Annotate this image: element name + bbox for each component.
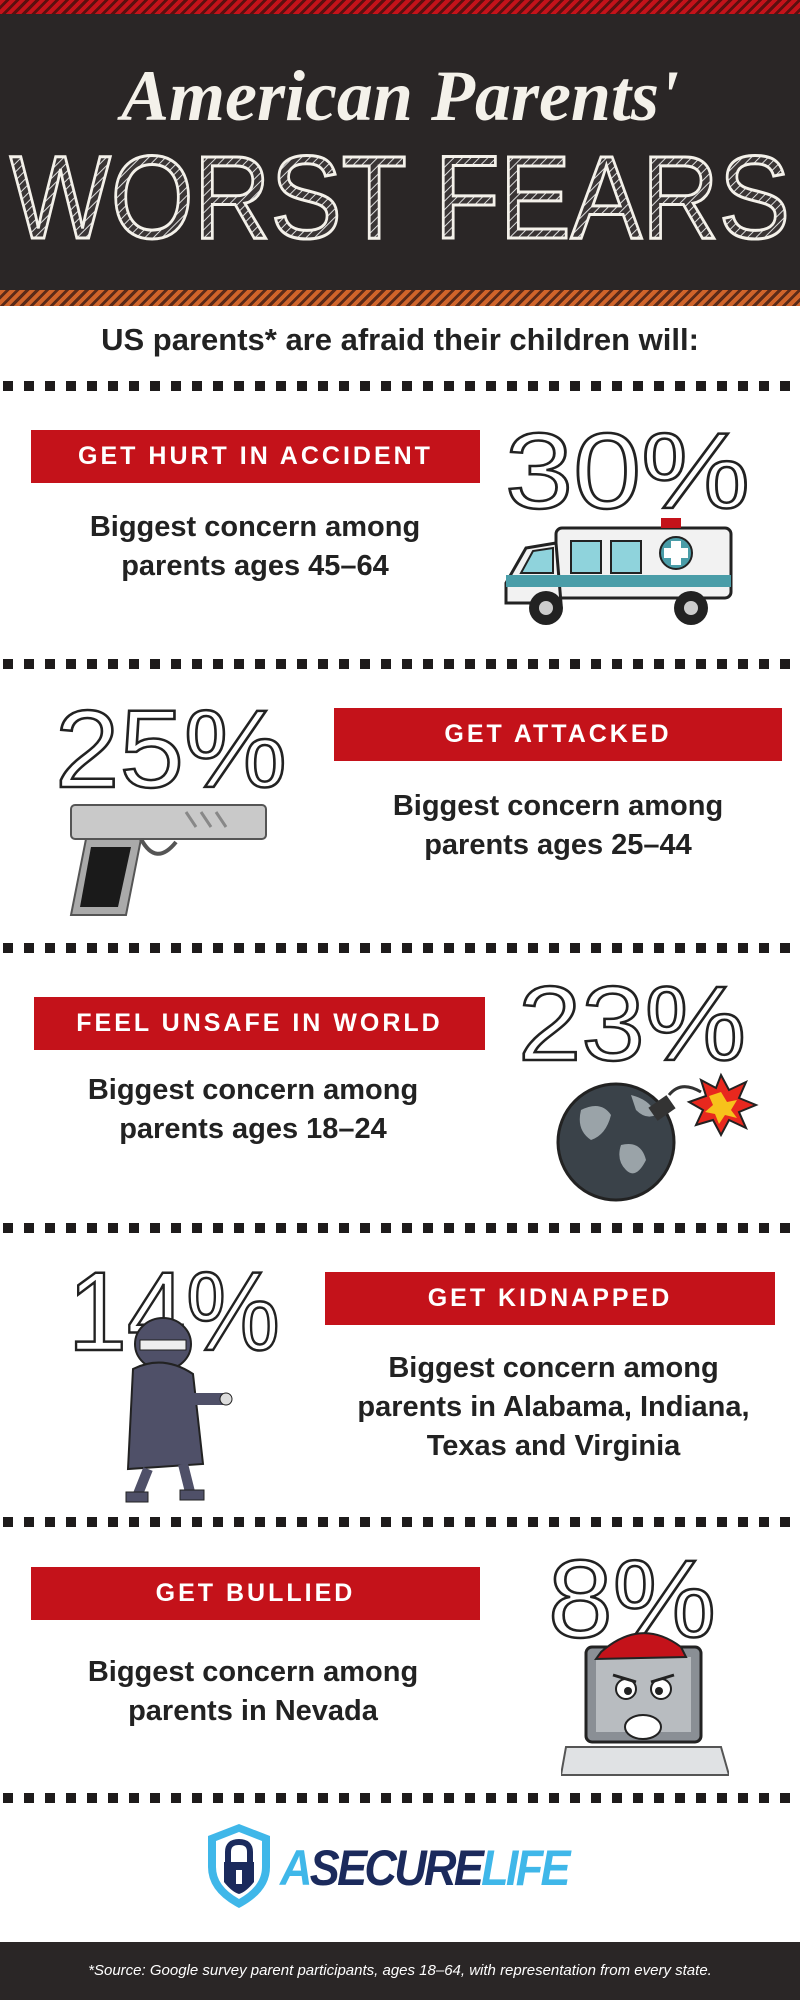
icon: gun [70,804,267,916]
label: GET KIDNAPPED [428,1284,672,1312]
bottom orange stripe [0,290,800,306]
description [88,1074,418,1145]
title: American Parents' [117,56,679,136]
description: Biggest concern among [88,1656,418,1688]
label: GET BULLIED [156,1579,355,1607]
description: Texas and Virginia [427,1430,680,1462]
section: attacked [55,695,782,916]
label: GET HURT IN ACCIDENT [78,442,433,470]
description: parents in Alabama, Indiana, [357,1391,750,1423]
label [31,430,480,483]
icon: globe bomb [556,1072,758,1202]
description: Biggest concern among [90,511,420,543]
section: accident [31,420,750,625]
description: Biggest concern among [393,790,723,822]
description: parents ages 45–64 [121,550,389,582]
header band [0,0,800,306]
description: parents in Nevada [128,1695,378,1727]
description: Biggest concern among [388,1352,719,1384]
logo [208,1824,572,1908]
label [31,1567,480,1620]
description: parents ages 25–44 [424,829,692,861]
top red stripe [0,0,800,14]
icon: kidnapper [126,1317,232,1502]
section: unsafe [34,972,758,1202]
icon: angry laptop [561,1632,729,1776]
label: GET ATTACKED [444,720,672,748]
footer [0,1942,800,2000]
description: Biggest concern among [88,1074,418,1106]
description [393,790,723,861]
section: kidnapped [68,1252,775,1502]
label: FEEL UNSAFE IN WORLD [76,1009,443,1037]
source note: *Source: Google survey parent participants, ages 18–64, with representation from every state. [88,1962,712,1979]
description [88,1656,418,1727]
subtitle: US parents* are afraid their children will: [101,322,699,357]
icon: ambulance [504,518,732,625]
description [90,511,420,582]
label [334,708,782,761]
label [325,1272,775,1325]
wordmark: ASECURELIFE [280,1840,568,1896]
description: parents ages 18–24 [119,1113,387,1145]
description [357,1352,750,1462]
label [34,997,485,1050]
section: bullied [31,1545,729,1776]
icon: shield lock [208,1824,270,1908]
title [8,56,790,264]
